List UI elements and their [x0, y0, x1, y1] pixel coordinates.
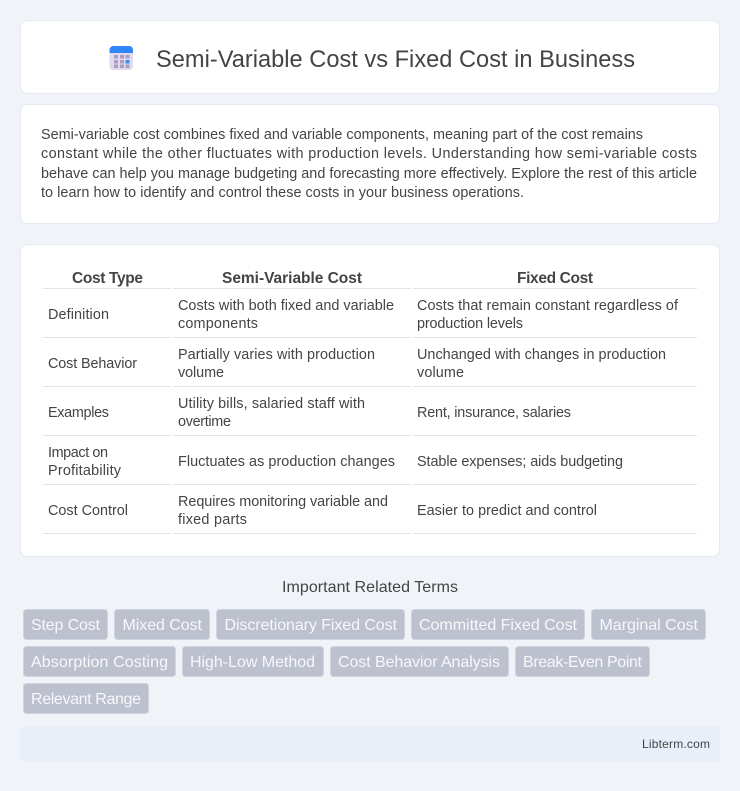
- row: cost control: Cost Control: [48, 503, 128, 519]
- row: cost behavior: volume: [178, 365, 224, 381]
- related term tags: High-Low Method: [190, 654, 315, 671]
- row: examples: Examples: [48, 405, 109, 421]
- related term tags: Discretionary Fixed Cost: [224, 617, 398, 634]
- related term tags: Step Cost: [31, 617, 101, 634]
- related term tags: Absorption Costing: [31, 654, 168, 671]
- table header: Cost Type: [72, 270, 143, 287]
- panel: introduction: [20, 104, 720, 224]
- row: cost behavior: Unchanged with changes in production: [417, 347, 666, 363]
- footer: Libterm.com: [642, 737, 710, 751]
- intro paragraph: Semi-variable cost combines fixed and variable components, meaning part of the cost remains: [41, 127, 643, 143]
- row: examples: overtime: [178, 414, 231, 430]
- row: definition: components: [178, 316, 258, 332]
- intro paragraph: to learn how to identify and control these costs in your business operations.: [41, 185, 524, 201]
- row: examples: [48, 396, 571, 430]
- panel: comparison table: [20, 244, 720, 556]
- related term tags: Committed Fixed Cost: [419, 617, 578, 634]
- row: impact on profitability: Impact on: [48, 445, 108, 461]
- row: definition: production levels: [417, 316, 523, 332]
- table header: Fixed Cost: [517, 270, 593, 287]
- row: cost control: Easier to predict and control: [417, 503, 597, 519]
- row: cost behavior: [48, 347, 666, 381]
- row: cost behavior: volume: [417, 365, 464, 381]
- heading: important related terms: Important Related Terms: [282, 579, 458, 596]
- row: cost behavior: Partially varies with production: [178, 347, 375, 363]
- row: definition: Definition: [48, 307, 109, 323]
- row: cost control: fixed parts: [178, 512, 247, 528]
- row: definition: Costs that remain constant regardless of: [417, 298, 679, 314]
- table header: [72, 270, 593, 287]
- title: Semi-Variable Cost vs Fixed Cost in Business: [156, 47, 635, 73]
- intro paragraph: [41, 127, 697, 201]
- row: examples: Rent, insurance, salaries: [417, 405, 571, 421]
- related term tags: Break-Even Point: [523, 654, 643, 671]
- row: cost control: [48, 494, 597, 528]
- footer: [20, 727, 720, 761]
- row: impact on profitability: Stable expenses; aids budgeting: [417, 454, 623, 470]
- row: definition: Costs with both fixed and variable: [178, 298, 394, 314]
- related term tags: [24, 610, 706, 714]
- row: cost control: Requires monitoring variable and: [178, 494, 388, 510]
- related term tags: Cost Behavior Analysis: [338, 654, 500, 671]
- intro paragraph: constant while the other fluctuates with production levels. Understanding how semi-variable costs: [41, 146, 697, 162]
- related term tags: Mixed Cost: [122, 617, 203, 634]
- row: definition: [48, 298, 679, 332]
- related term tags: Relevant Range: [31, 691, 141, 708]
- row: impact on profitability: Profitability: [48, 463, 122, 479]
- row: impact on profitability: [48, 445, 623, 479]
- intro paragraph: behave can help you manage budgeting and forecasting more effectively. Explore the rest of this article: [41, 166, 697, 182]
- related term tags: Marginal Cost: [600, 617, 699, 634]
- icon: calendar: [110, 46, 133, 70]
- row: impact on profitability: Fluctuates as production changes: [178, 454, 395, 470]
- row: cost behavior: Cost Behavior: [48, 356, 137, 372]
- panel: title card: [20, 20, 720, 94]
- row: examples: Utility bills, salaried staff with: [178, 396, 365, 412]
- table header: Semi-Variable Cost: [222, 270, 362, 287]
